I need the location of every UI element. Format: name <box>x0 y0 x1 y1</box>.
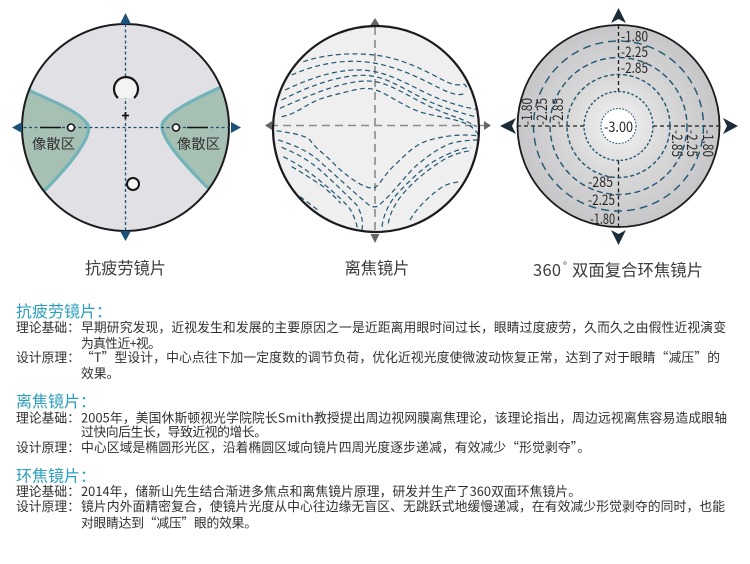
power labels top: -1.80 <box>621 26 648 46</box>
theory text: 2014年，储新山先生结合渐进多焦点和离焦镜片原理，研发并生产了360双面环焦镜片。 <box>81 481 581 500</box>
far vision circle <box>114 77 138 98</box>
power labels left: -2.25 <box>532 98 552 125</box>
design text: 设计原理： <box>16 347 80 366</box>
power labels left: -2.85 <box>548 98 568 125</box>
label left: 像散区 <box>32 133 75 154</box>
central zone <box>601 108 636 144</box>
astigmatism zone left <box>23 89 90 192</box>
fitting cross <box>122 112 129 119</box>
near and far reference axes <box>18 24 231 231</box>
design text: 对眼睛达到“减压”眼的效果。 <box>81 512 257 532</box>
panel: defocus lens diagram <box>265 18 491 243</box>
power labels left: -1.80 <box>517 98 537 125</box>
axis arrows <box>12 13 241 241</box>
design text: “T”型设计，中心点往下加一定度数的调节负荷，优化近视光度使微波动恢复正常，达到了对于眼睛“减压”的 <box>81 347 720 366</box>
astigmatism zone right <box>160 86 228 189</box>
heading: 环焦镜片： <box>16 462 96 486</box>
lens body <box>22 24 229 231</box>
power labels right: -2.25 <box>682 130 702 157</box>
power labels bottom <box>588 172 615 229</box>
power labels right <box>667 130 718 157</box>
theory text: 理论基础： <box>16 408 80 426</box>
central power label: -3.00 <box>604 117 633 137</box>
power labels left <box>517 98 568 125</box>
lens body <box>273 26 479 232</box>
lens outline <box>518 25 720 227</box>
caption: ring focus lens: 双面复合环焦镜片 <box>572 257 703 281</box>
theory text: 为真性近+视。 <box>81 333 161 352</box>
axes <box>517 25 720 227</box>
design text: 设计原理： <box>16 437 80 456</box>
power labels bottom: -1.80 <box>590 209 615 229</box>
theory text: 过快向后生长，导致近视的增长。 <box>81 422 267 440</box>
panel: anti-fatigue lens diagram <box>10 13 241 241</box>
caption: defocus lens: 离焦镜片 <box>345 255 409 279</box>
arrows <box>500 8 738 245</box>
design text <box>16 496 725 532</box>
power labels top <box>621 26 648 78</box>
section: defocus lens <box>16 388 727 456</box>
power labels top: -2.25 <box>621 42 648 62</box>
power contour lines <box>277 54 478 230</box>
theory text: 理论基础： <box>16 481 80 500</box>
theory text: 理论基础： <box>16 317 80 336</box>
caption: ring focus lens: 360 <box>533 257 561 281</box>
label right: 像散区 <box>177 133 220 154</box>
engraving marks <box>40 124 208 131</box>
heading: 抗疲劳镜片： <box>16 298 112 322</box>
power labels bottom: -285 <box>588 172 613 192</box>
axes <box>270 27 485 231</box>
theory text <box>16 408 727 440</box>
caption: ring focus lens: ° <box>563 258 567 274</box>
theory text: 早期研究发现，近视发生和发展的主要原因之一是近距离用眼时间过长，眼睛过度疲劳，久而久之由假性近视演变 <box>81 317 726 336</box>
theory text: 2005年，美国休斯顿视光学院院长Smith教授提出周边视网膜离焦理论，该理论指出，周边远视离焦容易造成眼轴 <box>81 408 727 426</box>
lens body <box>518 25 720 227</box>
power labels bottom: -2.25 <box>588 190 615 210</box>
caption: anti-fatigue lens: 抗疲劳镜片 <box>85 255 166 279</box>
near vision circle <box>127 178 139 190</box>
section: ring focus lens <box>16 462 725 532</box>
power labels top: -2.85 <box>621 58 648 78</box>
lens outline <box>22 24 229 231</box>
power labels right: -2.85 <box>667 130 687 157</box>
section: anti-fatigue lens <box>16 298 726 382</box>
design text: 镜片内外面精密复合，使镜片光度从中心往边缘无盲区、无跳跃式地缓慢递减，在有效减少形觉剥夺的同时，也能 <box>81 496 725 515</box>
lens outline <box>273 26 479 232</box>
heading: 离焦镜片： <box>16 388 96 412</box>
theory text <box>16 317 726 352</box>
design text: 效果。 <box>81 363 119 382</box>
arrows <box>265 18 491 243</box>
design text: 中心区域是椭圆形光区，沿着椭圆区域向镜片四周光度逐步递减，有效减少“形觉剥夺”。 <box>81 437 590 456</box>
power rings <box>534 41 704 211</box>
panel: ring focus lens diagram <box>500 8 738 245</box>
design text <box>16 347 720 382</box>
design text: 设计原理： <box>16 496 80 515</box>
power labels right: -1.80 <box>698 130 718 157</box>
